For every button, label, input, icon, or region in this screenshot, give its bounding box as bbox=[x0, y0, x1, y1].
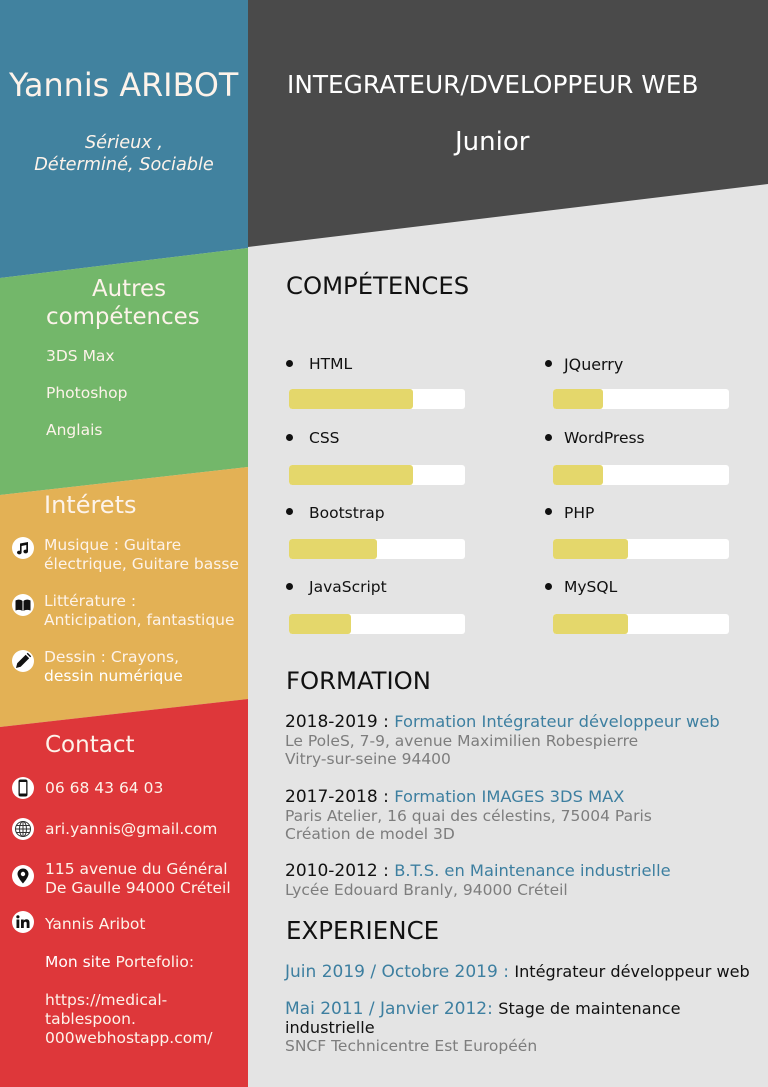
formation entry 2010-2012 bbox=[285, 861, 671, 899]
portfolio link: https://medical- bbox=[45, 991, 167, 1009]
portfolio link: 000webhostapp.com/ bbox=[45, 1029, 213, 1047]
experience entry 2011: industrielle bbox=[285, 1018, 375, 1037]
job level: Junior bbox=[455, 127, 529, 157]
formation entry 2018-2019 bbox=[285, 712, 720, 768]
interest: littérature bbox=[12, 592, 235, 629]
tagline bbox=[34, 133, 214, 175]
skill: JavaScript bbox=[286, 578, 465, 634]
skill: JQuerry: JQuerry bbox=[564, 355, 623, 374]
name: Yannis ARIBOT bbox=[9, 67, 238, 104]
heading: intérêts: Intérets bbox=[44, 491, 136, 519]
formation entry 2018-2019: Vitry-sur-seine 94400 bbox=[285, 750, 451, 768]
experience entry 2011 bbox=[285, 999, 681, 1055]
skill: JQuerry bbox=[545, 355, 729, 409]
skill: CSS: CSS bbox=[309, 429, 340, 447]
experience entry 2011: Mai 2011 / Janvier 2012: Stage de maintenance bbox=[285, 999, 681, 1019]
experience entry 2019: Juin 2019 / Octobre 2019 : Intégrateur développeur web bbox=[285, 962, 750, 982]
panel: autres compétences bbox=[46, 276, 200, 439]
heading: contact: Contact bbox=[45, 732, 134, 758]
portfolio link: Mon site Portefolio: bbox=[45, 953, 194, 971]
skill: WordPress: WordPress bbox=[564, 429, 645, 447]
interest: littérature: Anticipation, fantastique bbox=[44, 611, 235, 629]
skill: Bootstrap: Bootstrap bbox=[309, 504, 385, 522]
job title: INTEGRATEUR/DVELOPPEUR WEB bbox=[287, 70, 698, 99]
formation entry 2018-2019: Le PoleS, 7-9, avenue Maximilien Robespierre bbox=[285, 732, 638, 750]
tagline: Déterminé, Sociable bbox=[34, 155, 214, 175]
experience entry 2011: SNCF Technicentre Est Européén bbox=[285, 1037, 537, 1055]
heading: autres compétences bbox=[46, 276, 200, 330]
interest: dessin bbox=[12, 648, 183, 685]
interest: musique: Musique : Guitare bbox=[44, 536, 181, 554]
formation entry 2017-2018 bbox=[285, 787, 652, 843]
skill: HTML: HTML bbox=[309, 355, 352, 373]
heading: formation: FORMATION bbox=[286, 666, 431, 695]
heading: autres compétences: Autres bbox=[92, 276, 166, 302]
tagline: Sérieux , bbox=[85, 133, 163, 153]
skill: JavaScript: JavaScript bbox=[309, 578, 387, 596]
skill: MySQL: MySQL bbox=[564, 578, 617, 596]
contact: address: 115 avenue du Général bbox=[45, 860, 228, 878]
list of other skills: 3DS Max bbox=[46, 347, 115, 365]
skill: PHP: PHP bbox=[564, 504, 594, 522]
list of other skills bbox=[46, 347, 127, 439]
contact: address: De Gaulle 94000 Créteil bbox=[45, 879, 231, 897]
heading: autres compétences: compétences bbox=[46, 304, 200, 330]
panel: intérêts bbox=[12, 491, 239, 685]
formation entry 2010-2012: Lycée Edouard Branly, 94000 Créteil bbox=[285, 881, 568, 899]
formation entry 2018-2019: 2018-2019 : Formation Intégrateur développeur web bbox=[285, 712, 720, 732]
interest: dessin: dessin numérique bbox=[44, 667, 183, 685]
portfolio link: tablespoon. bbox=[45, 1010, 136, 1028]
skill: HTML bbox=[286, 355, 465, 409]
interest: musique bbox=[12, 536, 239, 573]
contact: linkedin bbox=[12, 911, 146, 933]
portfolio link bbox=[45, 953, 213, 1047]
interest: dessin: Dessin : Crayons, bbox=[44, 648, 179, 666]
contact: email bbox=[12, 818, 217, 840]
skill: CSS bbox=[286, 429, 465, 485]
interest: littérature: Littérature : bbox=[44, 592, 136, 610]
interest: musique: électrique, Guitare basse bbox=[44, 555, 239, 573]
skill: MySQL bbox=[545, 578, 729, 634]
skill: WordPress bbox=[545, 429, 729, 485]
formation entry 2017-2018: Paris Atelier, 16 quai des célestins, 75004 Paris bbox=[285, 807, 652, 825]
contact: address bbox=[12, 860, 231, 897]
contact: phone: 06 68 43 64 03 bbox=[45, 779, 163, 797]
skill: PHP bbox=[545, 504, 729, 559]
panel: contact bbox=[12, 732, 231, 1047]
formation entry 2017-2018: Création de model 3D bbox=[285, 825, 455, 843]
heading: experience: EXPERIENCE bbox=[286, 916, 439, 945]
contact: phone bbox=[12, 777, 163, 799]
panel: skills bbox=[286, 355, 729, 634]
skill: Bootstrap bbox=[286, 504, 465, 559]
formation entry 2017-2018: 2017-2018 : Formation IMAGES 3DS MAX bbox=[285, 787, 624, 807]
contact: email: ari.yannis@gmail.com bbox=[45, 820, 217, 838]
heading: compétences: COMPÉTENCES bbox=[286, 271, 469, 300]
list of other skills: Anglais bbox=[46, 421, 102, 439]
list of other skills: Photoshop bbox=[46, 384, 127, 402]
formation entry 2010-2012: 2010-2012 : B.T.S. en Maintenance industrielle bbox=[285, 861, 671, 881]
contact: linkedin: Yannis Aribot bbox=[45, 915, 145, 933]
